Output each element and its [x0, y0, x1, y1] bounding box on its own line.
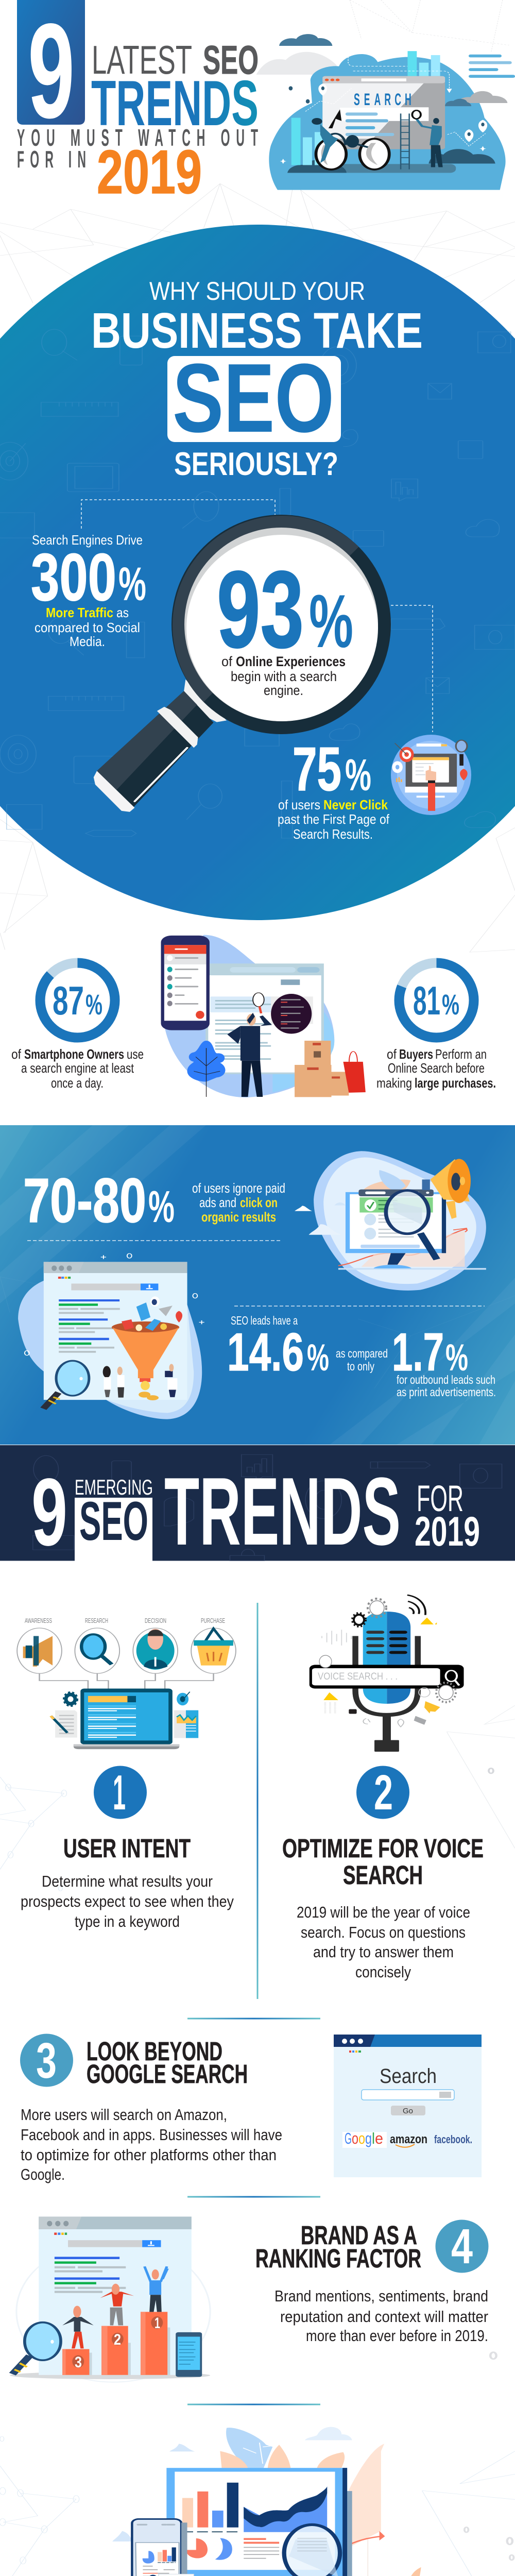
text: smartphone owners — [11, 1046, 144, 1091]
label: for 2019: FOR — [417, 1479, 464, 1519]
badge: SEO: SEO — [79, 1490, 148, 1552]
illustration: voice search microphone: VOICE SEARCH . . . — [318, 1671, 398, 1682]
stat: 14.6 percent vs 1.7 percent: SEO leads have a — [231, 1314, 298, 1327]
description: voice search: search. Focus on questions — [301, 1923, 466, 1941]
heading: brand as a ranking factor: RANKING FACTOR — [255, 2244, 421, 2273]
heading: why should your business take SEO seriously: WHY SHOULD YOUR — [149, 277, 365, 306]
stat: 300 percent more traffic: More Traffic — [46, 605, 113, 620]
illustration: browser with sales funnel — [18, 1253, 204, 1419]
number badge 2 — [356, 1765, 409, 1820]
illustration: search browser window: e — [375, 2129, 383, 2147]
description: user intent — [21, 1872, 234, 1930]
stat: 300 percent more traffic: compared to Social — [35, 620, 140, 635]
stat: 93 percent online experiences: 93 — [217, 548, 304, 670]
icon: monitor with target badge — [391, 735, 471, 815]
illustration: search browser window: G — [345, 2129, 352, 2147]
panel: why SEO circle — [0, 225, 515, 920]
stat: 70 to 80 percent: of users ignore paid — [192, 1180, 285, 1196]
heading: optimize for voice search: SEARCH — [343, 1860, 423, 1890]
text: podium numbers: 1 — [154, 2315, 160, 2332]
heading: latest SEO: LATEST — [92, 37, 192, 82]
number badge 1: 1 — [113, 1765, 126, 1820]
description: voice search: and try to answer them — [313, 1943, 454, 1961]
heading: why should your business take SEO seriously — [91, 277, 423, 482]
chart: 81 percent donut: 81 — [413, 978, 440, 1023]
number badge 4 — [436, 2219, 488, 2274]
text: buyers: Perform an — [435, 1046, 487, 1062]
faint background icons — [0, 329, 515, 658]
hero illustration: search browser and bicycle: SEARCH — [354, 91, 411, 109]
stat: 300 percent more traffic: % — [118, 558, 146, 611]
heading: why should your business take SEO seriously: BUSINESS TAKE — [91, 302, 423, 359]
panel: 9 emerging SEO trends banner — [0, 1445, 515, 1566]
illustration: search browser window — [334, 2035, 482, 2177]
text: smartphone owners: a search engine at least — [21, 1060, 134, 1076]
stat: 75 percent never click: Search Results. — [293, 826, 373, 842]
illustration: phone, browser and man with parcels — [161, 935, 366, 1097]
stat: 75 percent never click: % — [345, 751, 371, 800]
description: beyond google: Facebook and in apps. Businesses will have — [21, 2126, 282, 2144]
number badge 1 — [94, 1765, 147, 1820]
text: podium numbers: 2 — [114, 2331, 121, 2348]
text: smartphone owners: of — [11, 1046, 22, 1062]
stat: 70 to 80 percent: organic results — [201, 1209, 276, 1225]
year 2019: 2019 — [97, 138, 202, 207]
stat: 14.6 percent vs 1.7 percent: as compared — [336, 1347, 388, 1360]
heading: look beyond google search — [87, 2037, 248, 2089]
stat: 14.6 percent vs 1.7 percent: % — [445, 1337, 468, 1379]
stat: 75 percent never click: 75 — [293, 735, 341, 804]
heading: why should your business take SEO seriously: SEO — [173, 344, 334, 453]
text: podium numbers: 3 — [75, 2354, 82, 2371]
illustration: search browser window: Search — [380, 2065, 437, 2088]
illustration: search browser window: g — [365, 2129, 372, 2147]
illustration: monitor, magnifier and megaphone — [295, 1151, 486, 1291]
illustration: buyer journey and laptop: RESEARCH — [85, 1617, 108, 1624]
stat: 14.6 percent vs 1.7 percent — [227, 1314, 496, 1399]
stat: 300 percent more traffic — [31, 532, 146, 649]
stat: 14.6 percent vs 1.7 percent: 14.6 — [227, 1323, 304, 1382]
text: buyers: of — [387, 1046, 397, 1062]
text: buyers — [376, 1046, 496, 1091]
stat: 93 percent online experiences: Online Experiences — [236, 654, 346, 669]
hero illustration: search browser and bicycle — [256, 34, 515, 190]
trend 4: brand as a ranking factor — [10, 2216, 488, 2382]
description: beyond google: Google. — [21, 2165, 65, 2183]
stat: 75 percent never click: Never Click — [323, 797, 388, 812]
heading: brand as a ranking factor: BRAND AS A — [301, 2221, 417, 2250]
stat: 70 to 80 percent: ads and — [199, 1195, 236, 1210]
description: brand: Brand mentions, sentiments, brand — [274, 2287, 488, 2305]
badge: SEO — [75, 1490, 152, 1561]
stat: 70 to 80 percent: % — [148, 1182, 175, 1232]
text: smartphone owners: Smartphone Owners — [24, 1046, 124, 1062]
text: podium numbers — [75, 2315, 160, 2371]
text: smartphone owners: once a day. — [51, 1075, 104, 1091]
trend 5 and 6 illustration: analytics dashboard monitor and phone — [112, 2427, 426, 2576]
stat: 300 percent more traffic: 300 — [31, 539, 116, 615]
trend 2: optimize for voice search — [282, 1595, 484, 1981]
heading: user intent: USER INTENT — [63, 1834, 191, 1863]
stat: 93 percent online experiences: engine. — [264, 683, 303, 698]
subheading: you must watch out for in — [17, 124, 258, 173]
chart: 87 percent donut — [40, 963, 115, 1038]
description: beyond google — [21, 2106, 282, 2183]
icon: large magnifying glass — [94, 515, 391, 812]
stat: 70 to 80 percent: 70-80 — [23, 1165, 146, 1235]
subheading: you must watch out for in: YOU MUST WATCH OUT — [17, 124, 258, 151]
number badge 2: 2 — [374, 1765, 393, 1820]
number badge 3: 3 — [36, 2032, 57, 2089]
stat: 300 percent more traffic: as — [116, 605, 129, 620]
title block — [17, 0, 259, 207]
description: brand — [274, 2287, 488, 2345]
stat: 14.6 percent vs 1.7 percent: to only — [347, 1360, 374, 1373]
heading: latest SEO: SEO — [203, 37, 259, 82]
stat: 75 percent never click: past the First Page of — [278, 811, 390, 827]
trend 1: user intent — [17, 1617, 236, 1930]
label: emerging: EMERGING — [75, 1475, 153, 1499]
stat: 70 to 80 percent: click on — [240, 1195, 278, 1210]
description: beyond google: More users will search on Amazon, — [21, 2106, 227, 2124]
description: user intent: Determine what results your — [42, 1872, 213, 1890]
description: voice search: 2019 will be the year of voice — [297, 1903, 470, 1921]
panel: smartphone and buyers stats — [11, 935, 496, 1097]
stat: 70 to 80 percent — [23, 1165, 285, 1235]
subheading: you must watch out for in: FOR IN — [17, 146, 86, 173]
text: buyers: Online Search before — [388, 1060, 485, 1076]
heading: trends: TRENDS — [91, 68, 259, 139]
stat: 300 percent more traffic: Media. — [70, 634, 105, 649]
chart: 81 percent donut — [399, 963, 474, 1038]
text: buyers: Buyers — [399, 1046, 433, 1062]
illustration: search browser window: o — [352, 2129, 358, 2147]
stat: 75 percent never click — [278, 735, 390, 842]
label: for 2019 — [415, 1479, 480, 1555]
illustration: ranking podium — [10, 2216, 210, 2382]
illustration: buyer journey and laptop: PURCHASE — [201, 1617, 225, 1624]
description: voice search — [297, 1903, 470, 1981]
illustration: search browser window: facebook. — [434, 2133, 472, 2146]
trend 3: look beyond google search — [20, 2032, 482, 2183]
illustration: search browser window: l — [372, 2129, 375, 2147]
description: user intent: prospects expect to see when they — [21, 1892, 234, 1910]
text: smartphone owners: use — [127, 1046, 144, 1062]
stat: 93 percent online experiences: begin with a search — [231, 669, 337, 684]
heading: look beyond google search: LOOK BEYOND — [87, 2037, 222, 2066]
illustration: buyer journey and laptop: DECISION — [145, 1617, 166, 1624]
stat: 93 percent online experiences: % — [309, 579, 353, 663]
panel: organic results stats — [0, 1125, 515, 1445]
description: voice search: concisely — [355, 1963, 411, 1981]
description: brand: reputation and context will matter — [280, 2308, 488, 2326]
stat: 75 percent never click: of users — [278, 797, 320, 812]
chart: 81 percent donut: % — [442, 988, 459, 1021]
illustration: buyer journey and laptop: AWARENESS — [25, 1617, 52, 1624]
chart: 87 percent donut: % — [85, 988, 102, 1021]
heading: why should your business take SEO seriously: SERIOUSLY? — [174, 446, 338, 482]
heading: optimize for voice search — [282, 1834, 484, 1890]
illustration: search browser window: amazon — [390, 2132, 427, 2146]
description: beyond google: to optimize for other platforms other than — [21, 2146, 277, 2164]
heading: look beyond google search: GOOGLE SEARCH — [87, 2059, 248, 2089]
label: for 2019: 2019 — [415, 1509, 480, 1555]
illustration: voice search microphone — [310, 1595, 464, 1752]
illustration: search browser window: Go — [403, 2107, 413, 2115]
numeral 9: 9 — [31, 1459, 67, 1566]
number badge 3 — [20, 2032, 73, 2089]
text: buyers: making — [376, 1075, 412, 1091]
stat: 14.6 percent vs 1.7 percent: % — [307, 1337, 329, 1379]
heading: brand as a ranking factor — [255, 2221, 421, 2273]
stat: 14.6 percent vs 1.7 percent: 1.7 — [392, 1323, 444, 1382]
illustration: search browser window: o — [358, 2129, 365, 2147]
badge: number 9 — [17, 0, 85, 146]
stat: 300 percent more traffic: Search Engines Drive — [32, 532, 143, 548]
number badge 4: 4 — [451, 2219, 473, 2274]
illustration: buyer journey and laptop — [17, 1617, 236, 1749]
description: user intent: type in a keyword — [75, 1912, 180, 1930]
stat: 93 percent online experiences: of — [221, 654, 232, 669]
chart: 87 percent donut: 87 — [53, 978, 84, 1023]
